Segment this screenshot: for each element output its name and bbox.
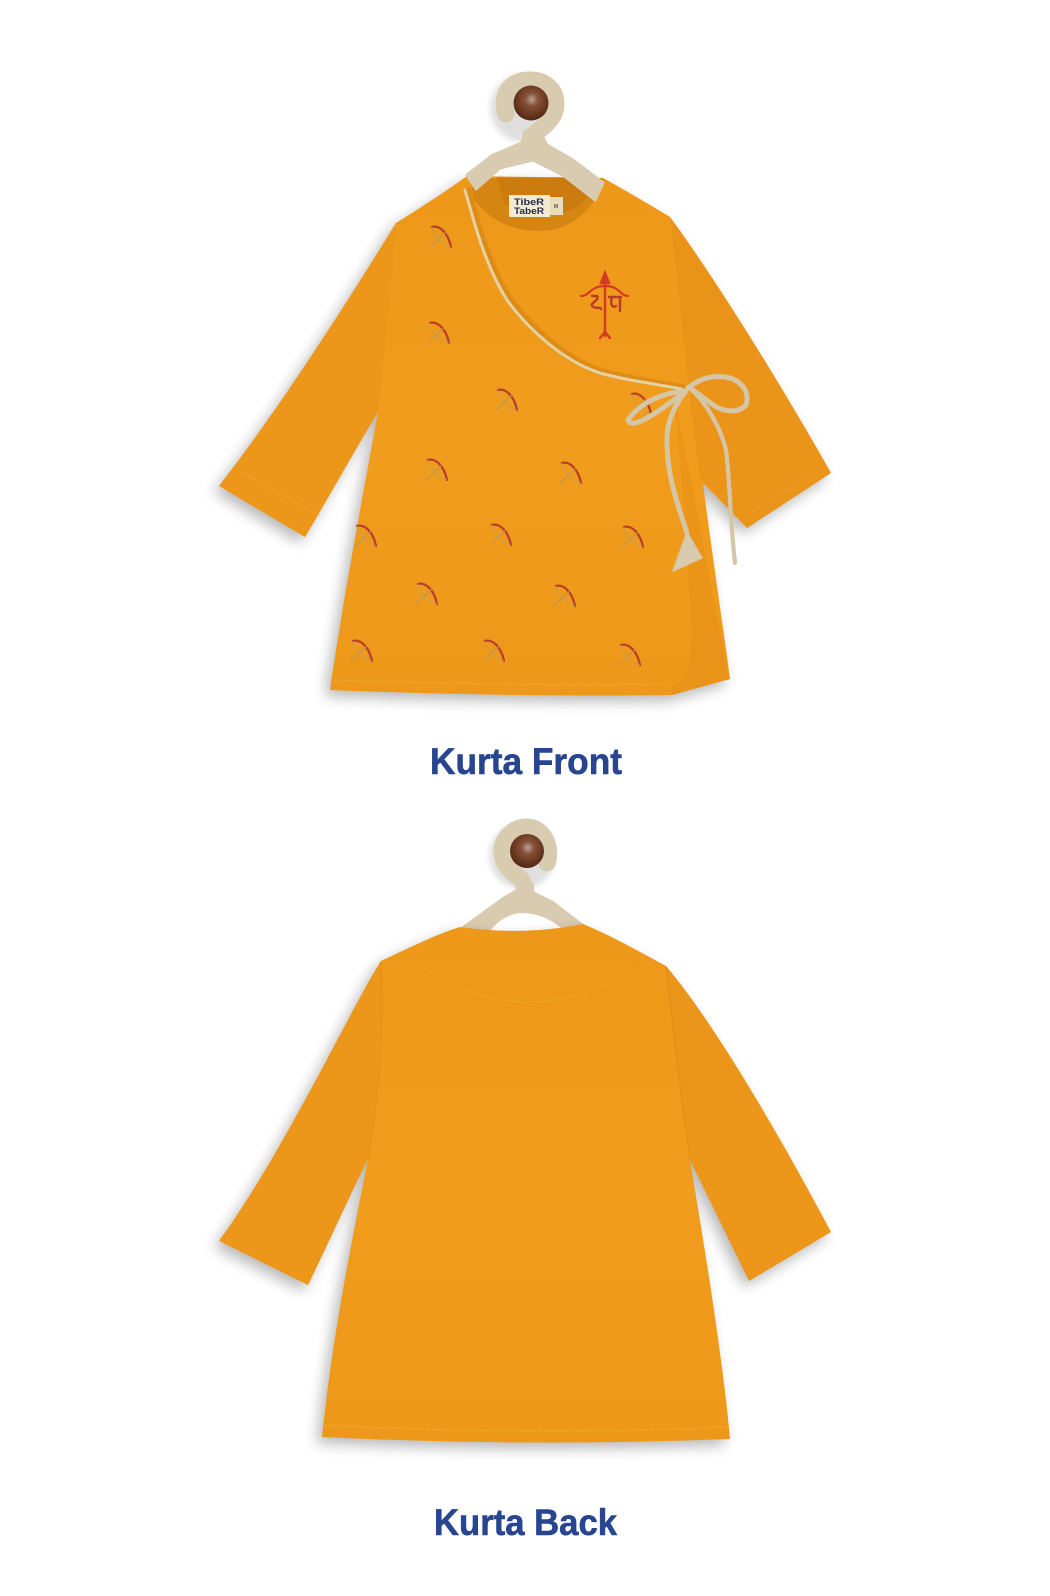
left sleeve shading: [219, 223, 396, 537]
wooden knob: [510, 834, 544, 868]
brand tag: [509, 195, 550, 217]
right loop: [688, 376, 747, 411]
fabric tie bow: [628, 376, 747, 571]
right sleeve shading: [670, 217, 831, 528]
kurta front body: [219, 176, 831, 695]
shadow: kurta back: [214, 930, 826, 1449]
right panel fold: [670, 390, 730, 695]
inner back neck: [470, 178, 603, 231]
sleeve seam left: [368, 961, 382, 1159]
shadow: front hanger on wall: [490, 74, 558, 142]
panel: kurta front: [214, 74, 831, 701]
tassel: [673, 532, 702, 571]
shadow: kurta front: [214, 182, 826, 701]
hanger hook: [502, 827, 549, 892]
icon: embroidered bow and arrow emblem: [581, 273, 628, 338]
shadow: back hanger on wall: [489, 823, 555, 889]
wrap flap shadow: [468, 188, 685, 387]
size tag: [549, 197, 563, 215]
neck lower shading: [497, 177, 597, 212]
kurta back body: [219, 924, 831, 1443]
heading: Kurta Front: Kurta Front: [430, 741, 622, 782]
right sleeve shading: [666, 966, 831, 1281]
yoke stitching: [424, 968, 630, 1002]
embroidered bow motifs: [351, 227, 651, 665]
left loop: [628, 391, 686, 423]
tail with tassel: [667, 393, 687, 533]
panel: kurta back: [214, 823, 831, 1449]
hem stitching: [324, 1425, 728, 1431]
brand name: TibeR: [514, 197, 545, 207]
sleeve seam right: [666, 966, 690, 1160]
size text: M: [554, 204, 558, 210]
long tail: [692, 390, 735, 563]
hanger hook: [504, 80, 556, 146]
front hanger: [467, 80, 603, 200]
hanger arm: [463, 884, 583, 933]
left sleeve shading: [219, 961, 381, 1285]
hanger arm: [467, 131, 603, 200]
sleeve and hem stitching: [242, 470, 816, 684]
heading: Kurta Back: Kurta Back: [434, 1502, 617, 1543]
wooden knob: [514, 86, 548, 120]
brand name second line: TabeR: [514, 206, 545, 216]
neck label: [509, 195, 563, 217]
back hanger: [463, 827, 583, 933]
piping along wrap: [465, 190, 682, 389]
